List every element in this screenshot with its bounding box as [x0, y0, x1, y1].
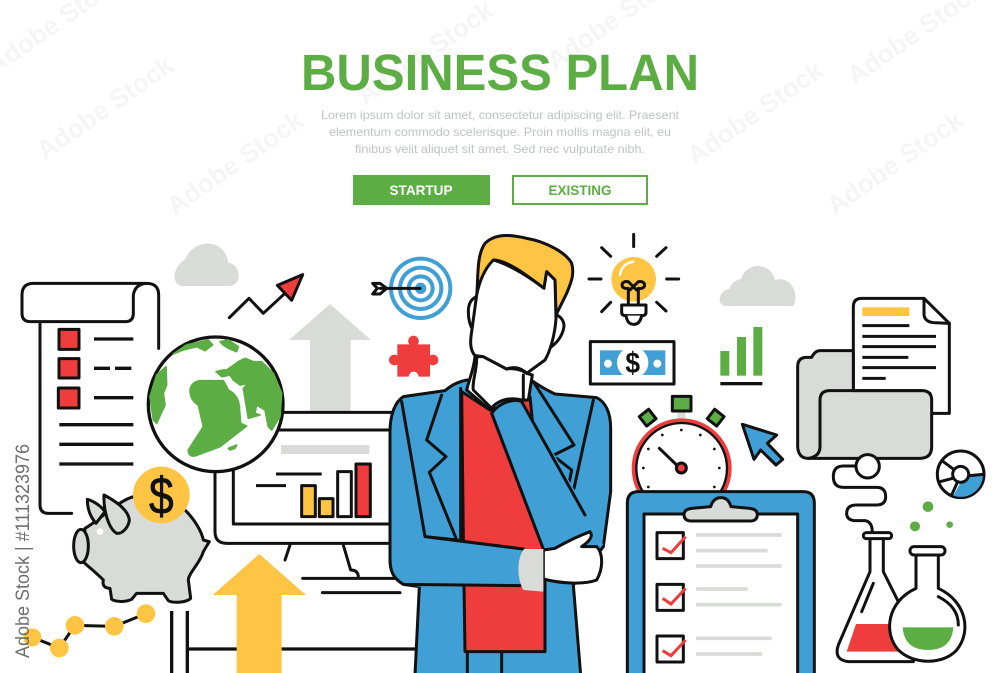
icon: stopwatch — [634, 396, 730, 516]
jacket — [390, 380, 611, 673]
button: existing — [513, 176, 647, 204]
icon: globe — [148, 337, 283, 472]
bar chart — [302, 464, 370, 517]
icon: target — [373, 257, 452, 320]
connector cable — [833, 466, 886, 533]
hand — [543, 532, 602, 583]
folded arm — [390, 525, 523, 587]
raised sleeve — [492, 400, 603, 550]
yellow dot line chart — [23, 604, 155, 657]
green bubbles — [910, 501, 953, 531]
icon: growth arrow — [229, 275, 303, 318]
trousers seams — [467, 652, 502, 673]
clip — [684, 498, 757, 521]
intro text block — [321, 108, 680, 156]
icon: green bars — [720, 327, 762, 385]
button: startup — [353, 175, 490, 205]
hair — [477, 235, 573, 315]
icon: dollar bill — [590, 342, 674, 384]
face — [471, 260, 556, 373]
scroll checklist — [22, 283, 159, 513]
checklist lines — [59, 339, 133, 464]
faint background watermark: Adobe Stock — [821, 104, 969, 220]
centre illustration cluster — [373, 234, 679, 673]
right illustration cluster — [627, 266, 984, 673]
left illustration cluster — [22, 244, 417, 673]
shirt — [462, 392, 545, 652]
icon: cloud left — [174, 244, 239, 286]
icon: round flask — [890, 547, 965, 661]
clipboard text lines — [696, 535, 782, 654]
floor lines — [172, 611, 417, 673]
button: existing: EXISTING — [548, 182, 612, 198]
faint background watermark — [0, 0, 989, 220]
monitor — [215, 412, 400, 593]
icon: clipboard — [627, 492, 814, 673]
icon: grey up arrow — [289, 304, 371, 412]
button: startup: STARTUP — [390, 182, 452, 198]
icon: light bulb — [589, 234, 679, 324]
connector node — [856, 455, 879, 478]
icon: pie chart — [937, 451, 984, 498]
faint background watermark: Adobe Stock — [161, 104, 309, 220]
icon: piggy bank — [74, 466, 209, 602]
faint background watermark: Adobe Stock — [681, 54, 829, 170]
neck and chin hand — [467, 357, 532, 410]
screen placeholder bar — [281, 445, 369, 454]
intro text block: Lorem ipsum dolor sit amet, consectetur adipiscing elit. Praesent — [321, 108, 680, 122]
icon: yellow up arrow — [213, 554, 306, 673]
check boxes — [657, 533, 683, 662]
icon: coin: $ — [149, 466, 174, 524]
businessman figure — [390, 235, 611, 673]
icon: cloud right — [720, 266, 795, 306]
icon: document — [853, 298, 949, 413]
intro text block: finibus velit aliquet sit amet. Sed nec vulputate nibh. — [355, 142, 645, 156]
icon: mouse cursor — [742, 424, 783, 465]
icon: folder — [798, 351, 932, 458]
intro text block: elementum commodo scelerisque. Proin mollis magna elit, eu — [329, 125, 671, 139]
icon: dollar bill: $ — [625, 347, 640, 380]
checklist squares — [58, 329, 79, 408]
faint background watermark: Adobe Stock — [31, 49, 179, 165]
check marks — [663, 537, 686, 656]
icon: conical flask — [837, 533, 913, 662]
lapels — [402, 382, 593, 540]
ears — [468, 297, 477, 331]
title: BUSINESS PLAN — [301, 44, 699, 101]
watermark: stock id: Adobe Stock | #111323976 — [13, 444, 34, 658]
icon: puzzle piece — [389, 336, 438, 377]
cuff — [518, 549, 543, 592]
